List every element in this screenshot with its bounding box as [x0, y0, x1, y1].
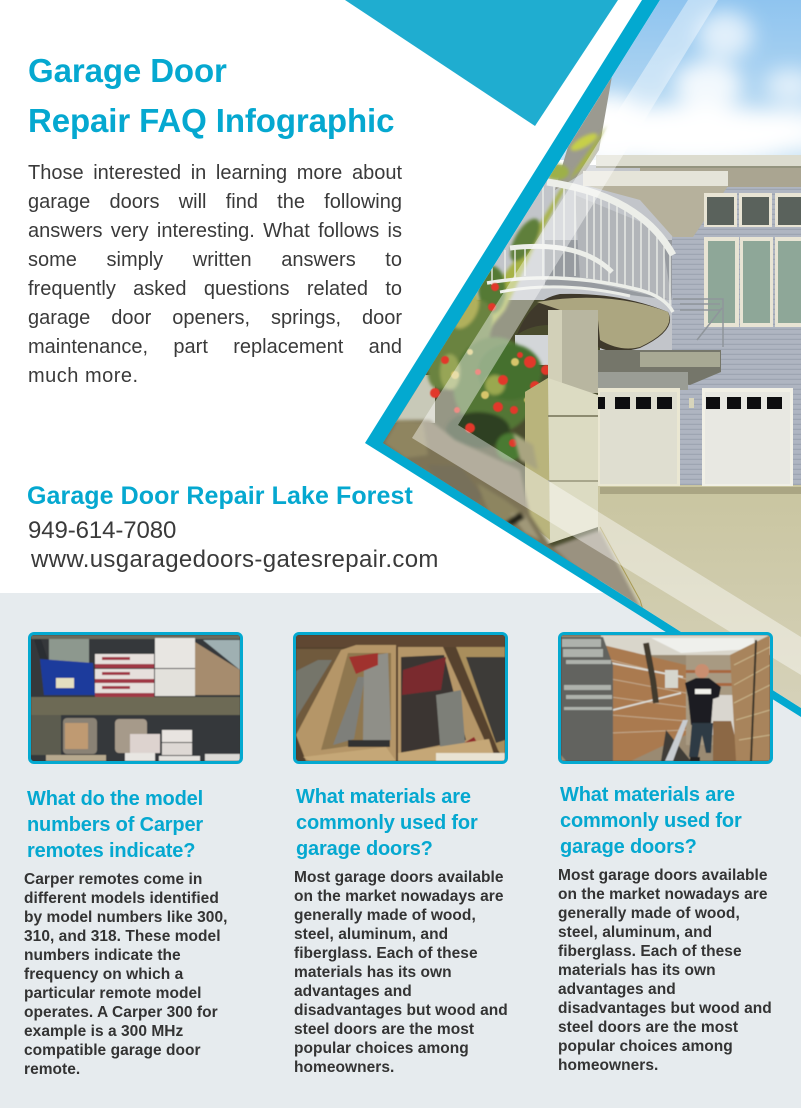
column 3 body: homeowners.	[558, 1057, 658, 1074]
garage door left	[598, 388, 680, 486]
title	[28, 52, 394, 139]
column 1 body: different models identified	[24, 890, 219, 907]
roof fascia	[596, 155, 801, 167]
contact block	[27, 482, 439, 573]
intro paragraph	[28, 162, 402, 387]
balcony railings	[487, 182, 673, 312]
wall behind balcony	[441, 179, 548, 350]
intro paragraph: garage doors will find the following	[28, 191, 402, 213]
column 2 heading: garage doors?	[296, 838, 433, 860]
foliage vine upper	[476, 126, 608, 328]
column 2 body: advantages and	[294, 983, 412, 1000]
title: Repair FAQ Infographic	[28, 102, 394, 139]
intro paragraph: Those interested in learning more about	[28, 162, 402, 184]
balcony slab	[517, 294, 670, 351]
column 2 body: steel doors are the most	[294, 1021, 474, 1038]
column 1 heading: remotes indicate?	[27, 840, 195, 862]
column 3 heading: What materials are	[560, 784, 735, 806]
column 2 body: Most garage doors available	[294, 869, 504, 886]
website: www.usgaragedoors-gatesrepair.com	[31, 546, 439, 573]
column 2 heading: commonly used for	[296, 812, 478, 834]
column 1 heading: numbers of Carper	[27, 814, 203, 836]
intro paragraph: frequently asked questions related to	[28, 278, 402, 300]
column 1 body: 310, and 318. These model	[24, 928, 221, 945]
column 2 heading: What materials are	[296, 786, 471, 808]
column 3 body: fiberglass. Each of these	[558, 943, 742, 960]
intro paragraph: garage door openers, springs, door	[28, 307, 402, 329]
column 2 body: fiberglass. Each of these	[294, 945, 478, 962]
column 1 body: frequency on which a	[24, 966, 183, 983]
intro paragraph: answers very interesting. What follows is	[28, 220, 402, 242]
concrete column and block	[562, 310, 598, 393]
column 2 body: homeowners.	[294, 1059, 394, 1076]
column 2 body: popular choices among	[294, 1040, 469, 1057]
photo: hardware parts in cardboard boxes	[293, 632, 508, 764]
column 3 body: materials has its own	[558, 962, 716, 979]
second concrete ledge	[598, 350, 721, 385]
column 2 body: generally made of wood,	[294, 907, 476, 924]
wall under slab	[515, 335, 548, 365]
blue chevron band	[365, 0, 801, 717]
teal corner triangle	[345, 0, 618, 126]
column 2 body: on the market nowadays are	[294, 888, 504, 905]
column 1 body: remote.	[24, 1061, 80, 1078]
column 1 body	[24, 871, 227, 1078]
column 3 body: popular choices among	[558, 1038, 733, 1055]
column 1 heading: What do the model	[27, 788, 203, 810]
balcony interior	[545, 240, 672, 300]
column 3 body: steel, aluminum, and	[558, 924, 712, 941]
column 2 body: steel, aluminum, and	[294, 926, 448, 943]
photo: opener boxes on shelves	[28, 632, 243, 764]
column 1 body: by model numbers like 300,	[24, 909, 227, 926]
column 2 body	[294, 869, 508, 1076]
intro paragraph: much more.	[28, 365, 139, 387]
column 3 body: steel doors are the most	[558, 1019, 738, 1036]
column 1 heading	[27, 788, 203, 862]
column 2 body: materials has its own	[294, 964, 452, 981]
column 1 body: example is a 300 MHz	[24, 1023, 183, 1040]
column 3 body: disadvantages but wood and	[558, 1000, 772, 1017]
column 1 body: compatible garage door	[24, 1042, 201, 1059]
top windows	[704, 193, 801, 327]
column 3 body	[558, 867, 772, 1074]
tree trunk	[555, 76, 612, 190]
dark base behind foliage and rocks	[383, 300, 600, 580]
intro paragraph: some simply written answers to	[28, 249, 402, 271]
column 3 body: advantages and	[558, 981, 676, 998]
rocks	[383, 418, 642, 607]
stair rail	[673, 299, 723, 347]
column 1 body: particular remote model	[24, 985, 202, 1002]
column 3 heading	[560, 784, 742, 858]
column 3 heading: commonly used for	[560, 810, 742, 832]
company name: Garage Door Repair Lake Forest	[27, 482, 413, 510]
column 3 body: generally made of wood,	[558, 905, 740, 922]
column 1 body: Carper remotes come in	[24, 871, 202, 888]
panel: grey lower background	[0, 593, 801, 1108]
photo: man inspecting stock in truck	[558, 632, 773, 764]
column 3 body: on the market nowadays are	[558, 886, 768, 903]
foliage with red flowers	[426, 292, 544, 462]
column 2 heading	[296, 786, 478, 860]
column 1 body: operates. A Carper 300 for	[24, 1004, 218, 1021]
pale wall behind foliage	[395, 375, 435, 423]
garage door right	[702, 388, 793, 486]
wall lamp	[689, 398, 694, 408]
phone number: 949-614-7080	[28, 517, 176, 544]
light chevron stripe overlay	[412, 0, 801, 675]
hero photo: house with garage doors	[360, 0, 801, 715]
driveway crack	[600, 527, 643, 610]
main siding	[672, 187, 801, 380]
intro paragraph: maintenance, part replacement and	[28, 336, 402, 358]
driveway	[598, 485, 801, 715]
upper overhang and soffit	[588, 186, 728, 237]
column 1 body: numbers indicate the	[24, 947, 181, 964]
column 3 heading: garage doors?	[560, 836, 697, 858]
column 3 body: Most garage doors available	[558, 867, 768, 884]
title: Garage Door	[28, 52, 227, 89]
column 2 body: disadvantages but wood and	[294, 1002, 508, 1019]
